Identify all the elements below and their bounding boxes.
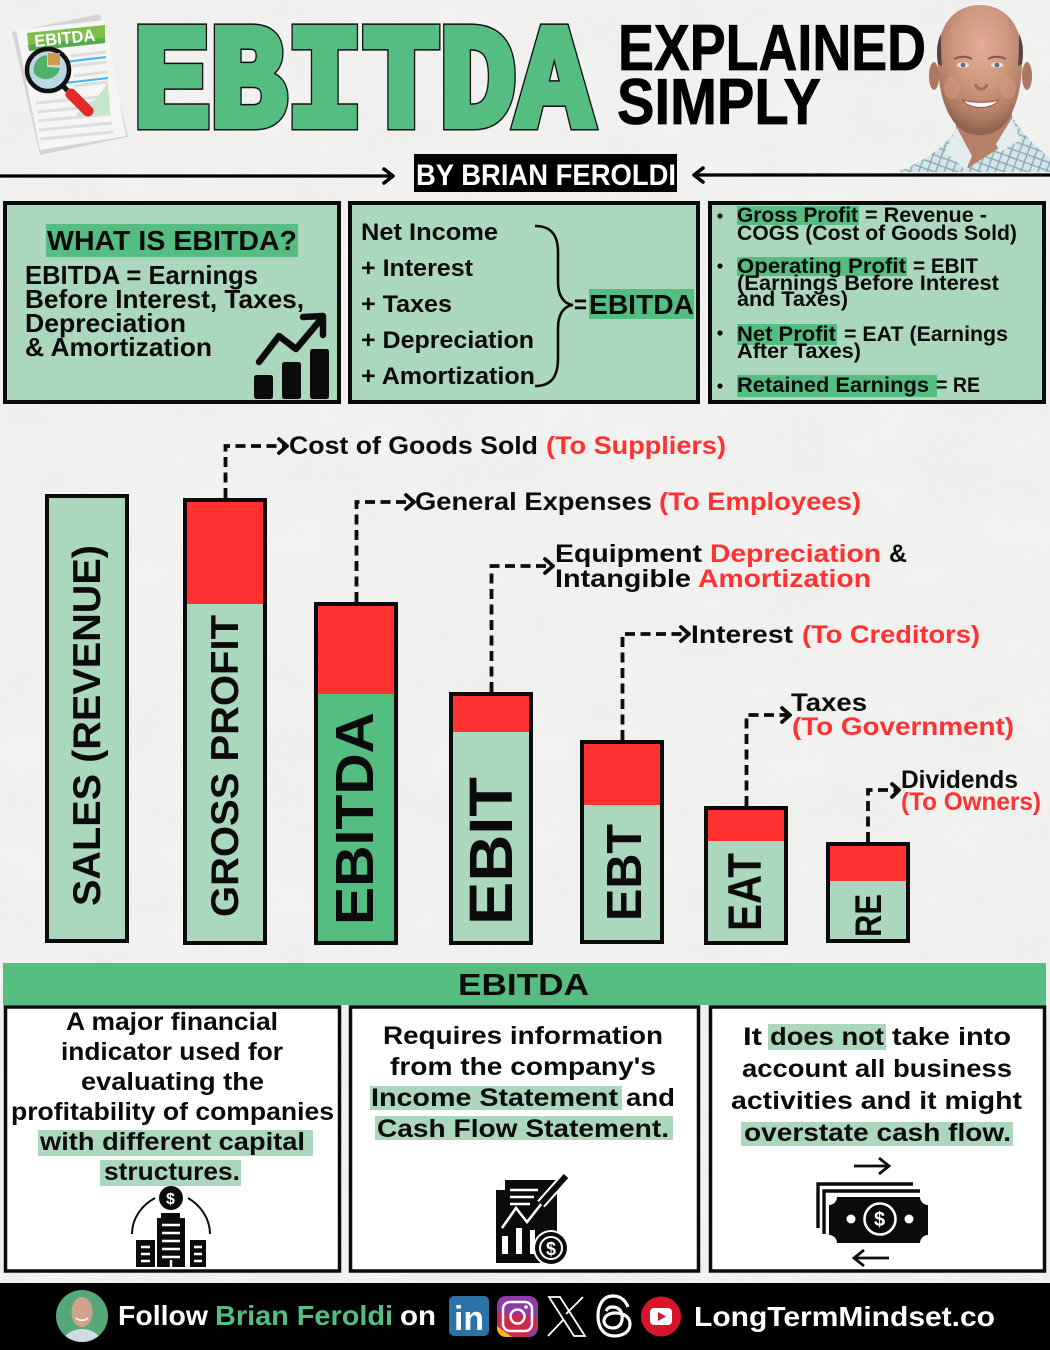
title: EBITDA: EBITDA	[134, 3, 593, 169]
icon: financial statement with pencil and coin	[496, 1176, 569, 1266]
definition: gross profit: Gross Profit	[737, 204, 858, 227]
arrow: gross profit to cost of goods sold	[226, 439, 287, 498]
definition: operating profit: = EBIT	[913, 255, 978, 278]
panel text: structures.	[104, 1158, 240, 1186]
bar: gross profit	[185, 500, 265, 943]
heading: what is EBITDA: WHAT IS EBITDA?	[47, 225, 297, 256]
follow text	[118, 1300, 436, 1331]
definition text	[25, 260, 304, 362]
label: cost of goods sold: (To Suppliers)	[546, 432, 726, 460]
subtitle: Explained Simply: SIMPLY	[617, 65, 821, 138]
arrow: EAT to taxes	[746, 708, 790, 806]
icon: YouTube	[641, 1296, 681, 1336]
icon: X	[548, 1297, 585, 1336]
label: depreciation and amortization: &	[889, 540, 907, 568]
label: depreciation and amortization: Equipment	[555, 540, 703, 568]
section banner: EBITDA: EBITDA	[458, 967, 589, 1002]
definition text: Before Interest, Taxes,	[25, 284, 304, 314]
label: taxes: Taxes	[791, 689, 867, 717]
panel text: does not	[770, 1023, 885, 1051]
panel text: and	[626, 1084, 675, 1112]
panel text: Cash Flow Statement.	[377, 1115, 669, 1143]
title: EBITDA: EBITDA	[134, 3, 593, 169]
arrow: EBT to interest	[622, 627, 689, 740]
formula list	[361, 219, 535, 390]
definition text: & Amortization	[25, 332, 212, 362]
bar: EBIT: EBIT	[457, 777, 525, 925]
panel: does not take into account	[710, 1007, 1044, 1271]
website: LongTermMindset.co	[694, 1301, 995, 1332]
label: general expenses: General Expenses	[415, 488, 652, 516]
subtitle: Explained Simply: EXPLAINED	[618, 11, 926, 84]
label: cost of goods sold: Cost of Goods Sold	[289, 432, 538, 460]
arrow: right to byline	[694, 168, 1050, 182]
definition: net profit	[717, 323, 1008, 363]
formula list: Net Income	[361, 219, 498, 246]
definition: net profit: After Taxes)	[737, 340, 861, 363]
icon: buildings with dollar coin: $	[166, 1191, 175, 1208]
formula list: + Amortization	[361, 363, 535, 390]
label: interest: Interest	[691, 621, 794, 649]
panel text: profitability of companies	[11, 1098, 334, 1126]
panel text	[731, 1023, 1023, 1147]
bar: EBT	[582, 742, 662, 942]
label: interest: (To Creditors)	[802, 621, 980, 649]
label: dividends	[901, 766, 1041, 816]
definition: retained earnings: = RE	[936, 374, 980, 397]
icon: Threads	[598, 1296, 630, 1336]
bar: RE: RE	[848, 894, 889, 937]
label: taxes: (To Government)	[792, 713, 1014, 741]
label: dividends: (To Owners)	[901, 788, 1041, 816]
icon: EBITDA report with magnifying glass: EBITDA	[33, 26, 96, 51]
label: depreciation and amortization: Intangible	[555, 565, 691, 593]
panel text: Income Statement	[371, 1084, 619, 1112]
icon: cash with arrows	[818, 1158, 928, 1266]
bar: gross profit: GROSS PROFIT	[204, 615, 247, 917]
icon: buildings with dollar coin	[132, 1186, 210, 1267]
icon: growth bar chart	[254, 316, 329, 399]
panel: EBITDA formula	[350, 203, 698, 402]
icon: Instagram	[497, 1296, 538, 1337]
panel text: take into	[892, 1023, 1011, 1051]
definition: operating profit: Operating Profit	[737, 255, 906, 278]
result: EBITDA: EBITDA	[589, 289, 694, 320]
subtitle: Explained Simply	[617, 11, 926, 138]
label: general expenses	[415, 488, 861, 516]
panel text: overstate cash flow.	[744, 1119, 1011, 1147]
arrow: left to byline	[0, 169, 393, 183]
result: EBITDA: =	[574, 289, 587, 319]
panel: what is EBITDA	[5, 203, 339, 402]
formula list: + Interest	[361, 255, 473, 282]
label: depreciation and amortization: Amortization	[698, 565, 871, 593]
definition: gross profit: = Revenue -	[865, 204, 987, 227]
label: depreciation and amortization	[555, 540, 907, 593]
panel: major financial indicator	[6, 1007, 340, 1271]
panel text: A major financial	[66, 1008, 278, 1036]
panel text: evaluating the	[81, 1068, 264, 1096]
avatar	[56, 1290, 108, 1345]
label: dividends: Dividends	[901, 766, 1018, 794]
follow text: Brian Feroldi	[215, 1300, 393, 1331]
section banner: EBITDA	[3, 963, 1046, 1005]
bar: sales (revenue): SALES (REVENUE)	[66, 545, 109, 906]
brace	[535, 226, 573, 386]
label: interest	[691, 621, 980, 649]
definition: net profit: = EAT (Earnings	[844, 323, 1008, 346]
label: depreciation and amortization: Depreciation	[710, 540, 881, 568]
definition: retained earnings: Retained Earnings	[737, 374, 929, 397]
icon: financial statement with pencil and coin: $	[546, 1239, 556, 1259]
bar: EBITDA: EBITDA	[325, 712, 385, 925]
panel text: indicator used for	[61, 1038, 283, 1066]
formula list: + Taxes	[361, 291, 452, 318]
panel text: It	[743, 1023, 763, 1051]
panel text: with different capital	[39, 1128, 305, 1156]
formula list: + Depreciation	[361, 327, 534, 354]
definition: gross profit	[717, 204, 1017, 245]
panel text: account all business	[742, 1055, 1012, 1083]
bar: EAT	[706, 808, 786, 943]
definition: gross profit: COGS (Cost of Goods Sold)	[737, 222, 1017, 245]
definition: operating profit	[717, 255, 999, 311]
panel text	[370, 1022, 675, 1143]
definition text: Depreciation	[25, 308, 186, 338]
bar: EBIT	[451, 694, 531, 943]
portrait of Brian Feroldi	[898, 5, 1050, 172]
bar: EBITDA	[316, 604, 396, 943]
arrow: RE to dividends	[868, 784, 899, 842]
panel text: activities and it might	[731, 1087, 1023, 1115]
follow text: Follow	[118, 1300, 208, 1331]
definition: operating profit: (Earnings Before Interest	[737, 272, 999, 295]
icon: EBITDA report with magnifying glass	[12, 14, 128, 155]
bar: EBT: EBT	[598, 824, 652, 921]
panel: requires information	[350, 1007, 698, 1271]
definition: net profit: Net Profit	[737, 323, 836, 346]
panel: profit definitions	[710, 203, 1044, 402]
bar: EAT: EAT	[718, 853, 771, 931]
icon: LinkedIn: in	[454, 1300, 484, 1338]
bar: sales (revenue)	[47, 496, 127, 941]
follow text: on	[400, 1300, 436, 1331]
label: general expenses: (To Employees)	[659, 488, 861, 516]
definition text: EBITDA = Earnings	[25, 260, 258, 290]
byline: By Brian Feroldi: BY BRIAN FEROLDI	[416, 159, 676, 192]
panel text	[11, 1008, 334, 1186]
label: cost of goods sold	[289, 432, 726, 460]
bar: RE	[828, 844, 908, 941]
definition: operating profit: and Taxes)	[737, 288, 848, 311]
icon: LinkedIn	[449, 1296, 489, 1338]
panel text: from the company's	[390, 1053, 656, 1081]
footer bar	[0, 1283, 1050, 1350]
arrow: EBIT to depreciation and amortization	[492, 559, 553, 692]
panel text: Requires information	[383, 1022, 663, 1050]
label: taxes	[791, 689, 1014, 741]
icon: cash with arrows: $	[874, 1209, 885, 1231]
arrow: EBITDA to general expenses	[356, 495, 414, 602]
